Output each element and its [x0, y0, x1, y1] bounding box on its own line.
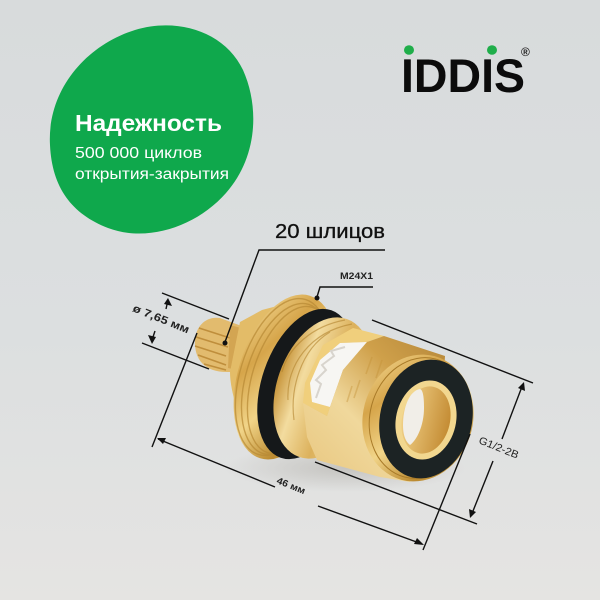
label: G1/2-2B: G1/2-2B — [477, 435, 520, 462]
cylindrical body — [303, 336, 445, 482]
rim groove — [356, 346, 484, 490]
label: 46 mm: 46 мм — [275, 476, 307, 497]
threaded neck — [256, 304, 390, 472]
threaded collar — [215, 282, 355, 472]
line: stem arrow lower — [152, 331, 155, 340]
registered mark: ® — [521, 45, 530, 59]
line: G arrow upper — [502, 384, 523, 439]
neck thread marks — [282, 320, 352, 420]
window frame — [303, 328, 384, 416]
blob heading: Надежность — [75, 110, 222, 136]
product: brass cartridge — [195, 282, 488, 494]
logo dots — [404, 45, 497, 55]
label: diameter 7,65 mm: ø 7,65 мм — [131, 303, 191, 336]
blob text: открытия-закрытия — [75, 166, 229, 183]
stem — [195, 318, 248, 372]
line: 46 dimension right — [318, 506, 422, 544]
front black seal — [368, 350, 484, 488]
line: body top extension — [372, 320, 533, 383]
black o-ring — [239, 296, 373, 472]
line: M24X1 leader — [317, 287, 373, 297]
engraved marks — [347, 357, 382, 402]
line: body bottom extension — [315, 462, 477, 524]
dimension lines — [142, 250, 533, 550]
blob shape — [50, 25, 253, 234]
line: G arrow lower — [471, 461, 493, 516]
front rim — [348, 342, 488, 494]
line: stem bottom extension — [142, 343, 209, 369]
line: stem top extension — [162, 293, 229, 319]
front bore — [388, 374, 464, 466]
line: length left extension — [152, 333, 197, 447]
blob text — [75, 145, 229, 183]
blob text: 500 000 циклов — [75, 145, 202, 162]
label: 20 slots: 20 шлицов — [275, 221, 385, 243]
line: G thread left extension — [423, 434, 470, 550]
line: 20 slots leader — [225, 250, 385, 342]
floor shadow — [225, 444, 465, 492]
line: 46 dimension left — [158, 439, 275, 487]
white ceramic — [310, 342, 367, 407]
label: M24X1: M24X1 — [340, 271, 374, 282]
line: stem arrow upper — [166, 300, 168, 309]
logo: IDDIS — [401, 45, 530, 102]
green blob panel — [50, 25, 253, 234]
logo wordmark: IDDIS — [401, 49, 525, 102]
ceramic teeth — [316, 347, 345, 398]
arrowheads and leader dots — [148, 296, 525, 545]
cartridge window — [303, 328, 384, 416]
